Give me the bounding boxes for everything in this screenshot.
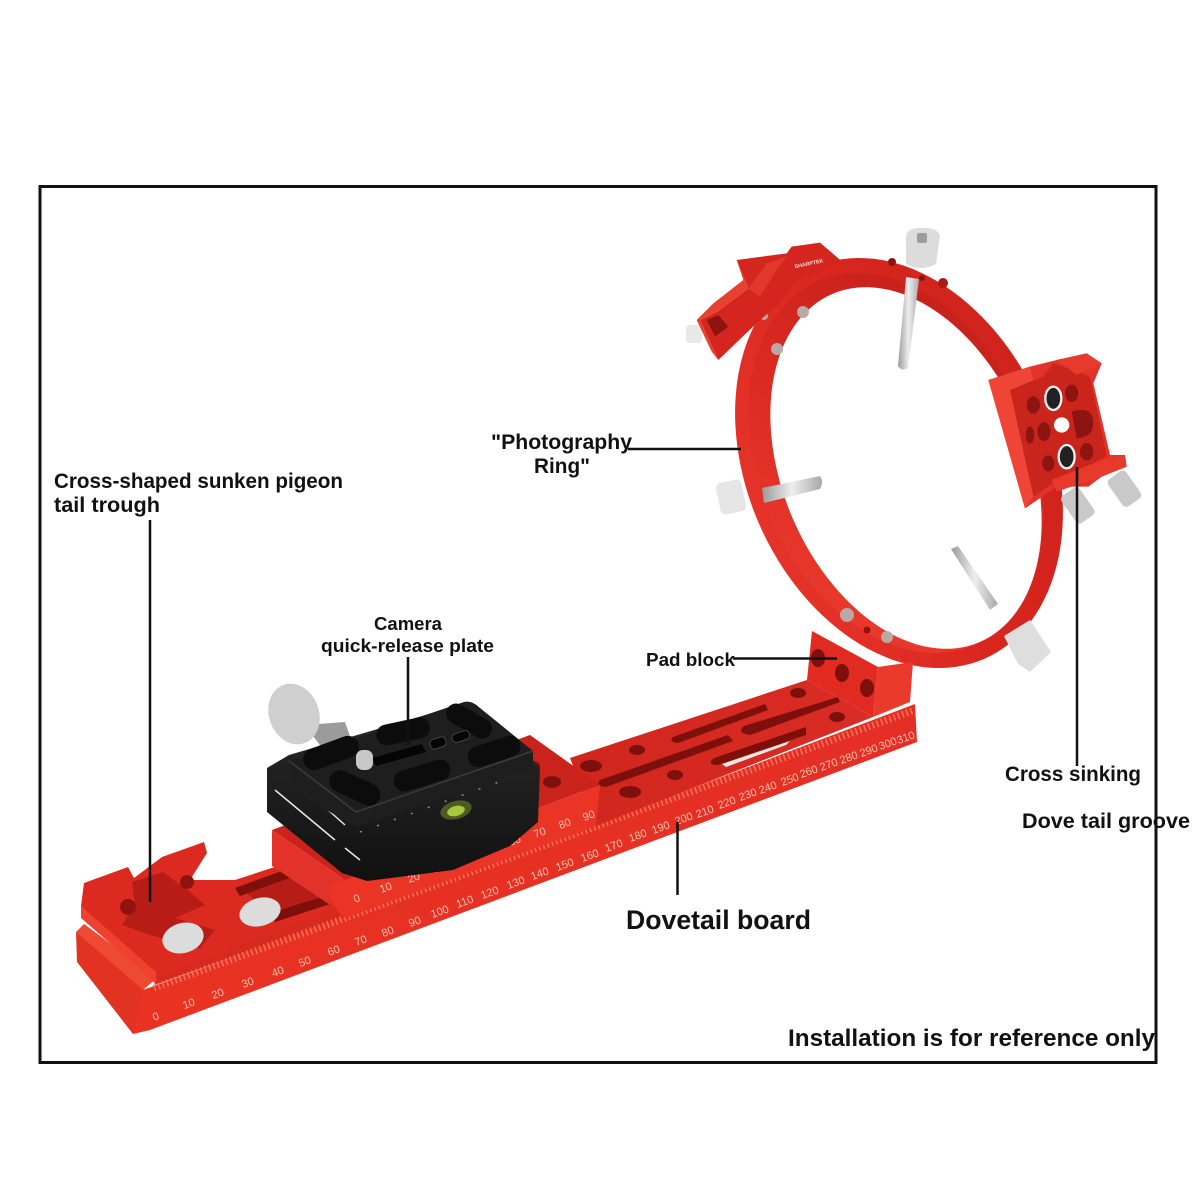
lower ruler numbers: 300 xyxy=(877,735,899,753)
lower ruler numbers: 280 xyxy=(838,749,860,767)
upper ruler numbers xyxy=(352,808,597,906)
lower ruler numbers: 140 xyxy=(529,865,551,883)
left block slots xyxy=(243,875,325,913)
callout leader lines xyxy=(150,449,1077,902)
rivets on ring xyxy=(760,258,948,643)
icon: left knob xyxy=(715,479,747,515)
upper ruler numbers: 40 xyxy=(457,850,473,866)
long section top xyxy=(570,680,873,826)
base ledge highlight xyxy=(76,924,157,990)
icon: top pin with knob xyxy=(898,228,940,370)
icon: silver knob xyxy=(260,676,352,752)
icon: left pin xyxy=(762,476,822,503)
plate top xyxy=(289,702,533,827)
ring body xyxy=(674,206,1124,720)
lower ruler numbers: 220 xyxy=(716,794,738,812)
lower ruler numbers: 200 xyxy=(673,810,695,828)
frame border xyxy=(40,186,1156,1062)
label: pad block: Pad block xyxy=(646,650,736,670)
lower ruler numbers: 110 xyxy=(455,894,475,911)
green bubble level xyxy=(438,797,474,823)
label: camera: Camera xyxy=(374,614,443,634)
clamp side grooves xyxy=(275,785,360,860)
lower wall xyxy=(150,786,600,985)
icon: bottom pin with knob xyxy=(951,546,1051,672)
base left end xyxy=(76,932,152,1034)
rubber pads xyxy=(300,700,523,809)
mounting screw xyxy=(356,750,373,770)
lower ruler face xyxy=(133,704,917,1034)
lower ruler numbers: 150 xyxy=(554,856,576,874)
plate slot and holes xyxy=(372,744,426,766)
lower ruler numbers: 0 xyxy=(151,1010,161,1024)
lower ruler numbers: 50 xyxy=(297,954,313,970)
lower ruler numbers xyxy=(151,729,917,1024)
photography ring assembly xyxy=(674,206,1143,720)
lower ruler numbers: 80 xyxy=(380,924,396,940)
label: quick-release plate: quick-release plate xyxy=(321,636,494,656)
lower ruler numbers: 310 xyxy=(895,729,917,747)
lower ruler numbers: 180 xyxy=(627,827,649,845)
label: photography ring: "Photography xyxy=(491,431,632,454)
upper ruler numbers: 60 xyxy=(507,833,523,849)
clamp body xyxy=(267,702,540,881)
upper ruler numbers: 10 xyxy=(378,880,394,896)
camera quick-release plate xyxy=(260,676,540,881)
lower ruler numbers: 100 xyxy=(429,903,451,921)
pad block xyxy=(807,631,913,717)
icon: top bracket screw knob xyxy=(686,325,702,343)
upper ruler numbers: 80 xyxy=(557,816,573,832)
lower ruler numbers: 20 xyxy=(210,986,226,1002)
lower ruler numbers: 130 xyxy=(505,874,527,892)
upper ruler numbers: 70 xyxy=(532,825,548,841)
lower ruler numbers: 120 xyxy=(479,884,501,902)
label: trough second line: tail trough xyxy=(54,494,160,517)
label: cross-shaped trough: Cross-shaped sunken pigeon xyxy=(54,470,343,493)
label: dovetail board: Dovetail board xyxy=(626,905,811,935)
lower ruler numbers: 90 xyxy=(407,914,423,930)
upper ruler numbers: 50 xyxy=(483,841,499,857)
icon: top-left dovetail bracket xyxy=(697,243,843,360)
lower ruler numbers: 290 xyxy=(858,742,880,760)
lower ruler numbers: 170 xyxy=(603,837,625,855)
icon: right dovetail plate xyxy=(988,353,1143,525)
lower ruler numbers: 210 xyxy=(694,803,716,821)
label: ring second line: Ring" xyxy=(534,455,590,478)
long section slots and holes xyxy=(580,688,845,798)
upper ruler numbers: 20 xyxy=(406,870,422,886)
icon: top-left dovetail bracket: SHARPTEK xyxy=(794,258,824,270)
upper ruler numbers: 90 xyxy=(581,808,597,824)
white gap in slot xyxy=(722,741,790,767)
lower ruler numbers: 160 xyxy=(579,847,601,865)
scale marks on clamp xyxy=(360,778,510,832)
lower ruler numbers: 230 xyxy=(737,786,759,804)
note: installation reference: Installation is for reference only xyxy=(788,1025,1156,1052)
lower ruler numbers: 260 xyxy=(798,763,820,781)
ruler tick band xyxy=(154,711,912,988)
lower ruler numbers: 190 xyxy=(650,819,672,837)
lower ruler numbers: 270 xyxy=(818,756,840,774)
lower ruler numbers: 250 xyxy=(779,771,801,789)
lower ruler numbers: 240 xyxy=(757,779,779,797)
lower ruler numbers: 40 xyxy=(270,964,286,980)
plate holes xyxy=(1026,385,1093,471)
plate screws xyxy=(1059,485,1096,525)
label: cross sinking: Cross sinking xyxy=(1005,763,1141,786)
raised block xyxy=(272,735,600,918)
dovetail board xyxy=(76,631,917,1034)
lower ruler numbers: 10 xyxy=(181,996,197,1012)
label: dove tail groove: Dove tail groove xyxy=(1022,810,1190,833)
icon: left block screws xyxy=(159,893,284,958)
upper ruler numbers: 30 xyxy=(431,860,447,876)
lower ruler numbers: 30 xyxy=(240,975,256,991)
lower ruler numbers: 60 xyxy=(326,943,342,959)
left block xyxy=(81,842,340,985)
upper ruler numbers: 0 xyxy=(352,892,362,906)
lower ruler numbers: 70 xyxy=(353,933,369,949)
